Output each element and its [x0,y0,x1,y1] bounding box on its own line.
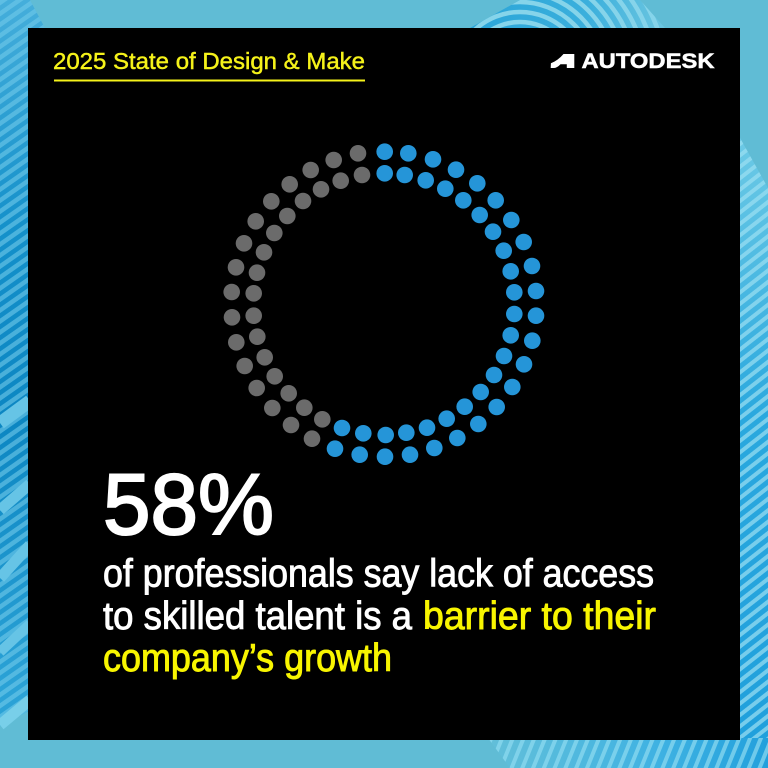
wordmark: AUTODESK [582,50,714,73]
logo: Autodesk [551,50,714,73]
left ribbon texture [0,0,46,726]
text block: statistic description: company’s growth [103,637,392,680]
icon: Autodesk mark [551,54,574,68]
text block: statistic description: to skilled talent is a [103,595,413,638]
text block: statistic description: barrier to their [423,595,656,638]
text block: statistic description: of professionals say lack of access [103,552,654,596]
chart: dotted donut 58 percent [223,143,544,465]
heading: report title: 2025 State of Design & Make [53,48,365,74]
top ribbon texture [470,0,664,28]
big number: 58% [103,457,274,553]
gray dots: remainder [223,145,370,447]
blue dots: 58 percent [327,143,544,465]
bottom ribbon texture [488,738,768,768]
text block: statistic description [103,552,656,680]
right ribbon texture [730,120,768,768]
